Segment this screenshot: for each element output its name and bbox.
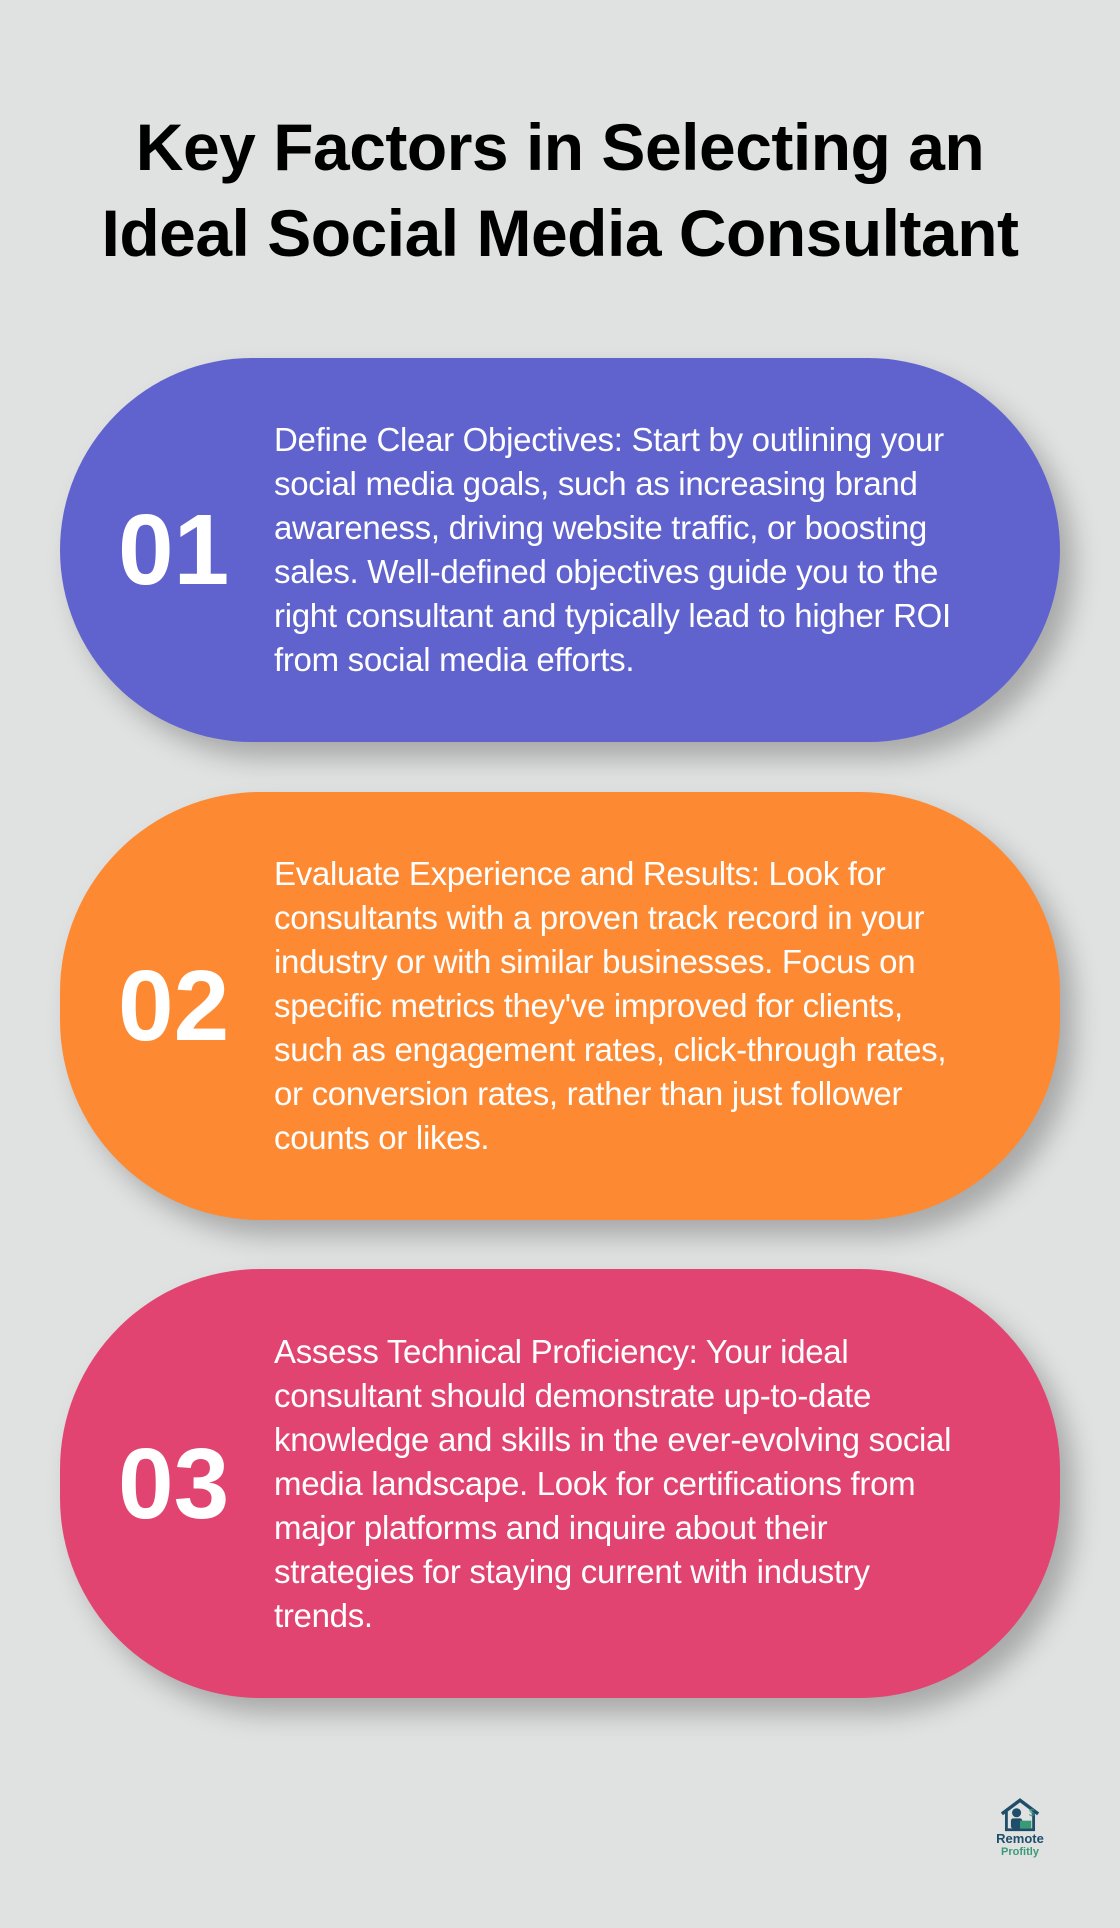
logo: Remote Profitly: $ bbox=[1029, 1808, 1035, 1819]
panel: 03 technical proficiency bbox=[60, 1269, 1060, 1698]
text block 02: such as engagement rates, click-through rates, bbox=[274, 1031, 946, 1068]
title: Key Factors in Selecting an bbox=[136, 110, 984, 184]
text block 03: consultant should demonstrate up-to-date bbox=[274, 1376, 871, 1414]
text block 01: from social media efforts. bbox=[274, 641, 634, 678]
text block 02 bbox=[274, 855, 946, 1156]
text block 02: specific metrics they've improved for clients, bbox=[274, 987, 903, 1024]
text block 03: major platforms and inquire about their bbox=[274, 1508, 827, 1546]
text block 02: consultants with a proven track record in your bbox=[274, 899, 924, 936]
text block 01 bbox=[274, 421, 951, 678]
logo: Remote Profitly bbox=[996, 1798, 1044, 1858]
text block 03: knowledge and skills in the ever-evolving social bbox=[274, 1420, 951, 1458]
text block 01: sales. Well-defined objectives guide you to the bbox=[274, 553, 938, 590]
logo: Remote Profitly: Profitly bbox=[1001, 1846, 1039, 1858]
text block 01: right consultant and typically lead to higher ROI bbox=[274, 597, 951, 634]
panel: 02 evaluate experience bbox=[60, 792, 1060, 1220]
text block 03 bbox=[274, 1332, 951, 1634]
text block 01: awareness, driving website traffic, or boosting bbox=[274, 509, 927, 546]
text block 02: counts or likes. bbox=[274, 1119, 489, 1156]
text block 01: Define Clear Objectives: Start by outlining your bbox=[274, 421, 944, 458]
text block 01: social media goals, such as increasing brand bbox=[274, 465, 918, 502]
number 01: 01 bbox=[118, 494, 229, 606]
title bbox=[101, 110, 1018, 270]
logo: Remote Profitly: Remote bbox=[996, 1831, 1044, 1846]
text block 03: Assess Technical Proficiency: Your ideal bbox=[274, 1332, 848, 1370]
text block 02: or conversion rates, rather than just follower bbox=[274, 1075, 902, 1112]
number 02: 02 bbox=[118, 950, 229, 1062]
title: Ideal Social Media Consultant bbox=[101, 196, 1018, 270]
text block 02: industry or with similar businesses. Focus on bbox=[274, 943, 915, 980]
text block 03: trends. bbox=[274, 1596, 373, 1634]
number 03: 03 bbox=[118, 1428, 229, 1540]
text block 02: Evaluate Experience and Results: Look for bbox=[274, 855, 885, 892]
text block 03: strategies for staying current with industry bbox=[274, 1552, 870, 1590]
text block 03: media landscape. Look for certifications from bbox=[274, 1464, 915, 1502]
panel: 01 define objectives bbox=[60, 358, 1060, 742]
